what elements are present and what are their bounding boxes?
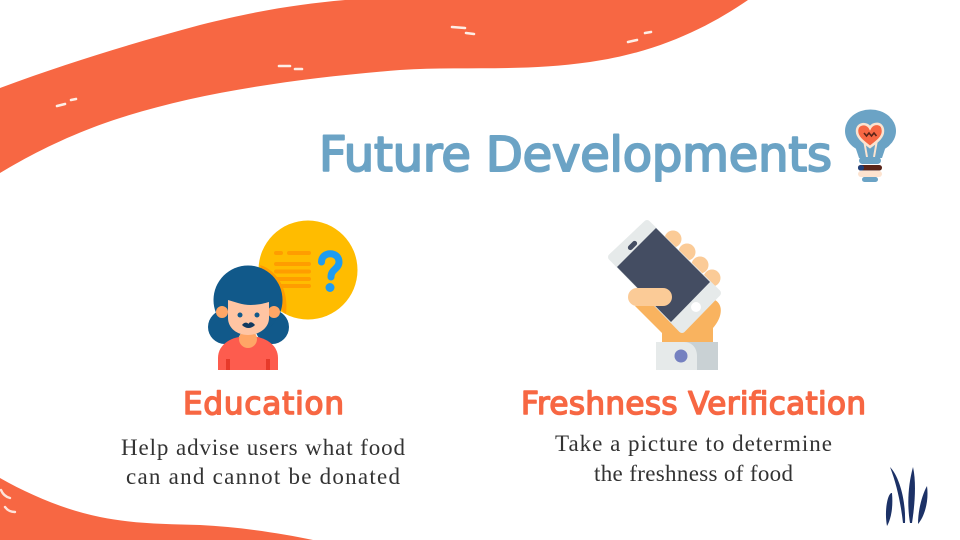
hand xyxy=(635,230,721,342)
text: education description: can and cannot be donated xyxy=(126,464,400,489)
icon: girl with question speech bubble xyxy=(208,220,358,370)
cuff xyxy=(656,342,718,370)
icon: navy grass logo xyxy=(886,467,928,526)
text: freshness description: the freshness of food xyxy=(594,461,794,486)
icon: light bulb with heart xyxy=(845,110,896,182)
text: freshness description: Take a picture to determine xyxy=(555,431,832,456)
text: education description xyxy=(121,435,406,489)
thumb xyxy=(628,288,672,306)
heading: Freshness Verification: Freshness Verification xyxy=(521,386,866,422)
text: freshness description xyxy=(555,431,832,486)
speech bubble xyxy=(258,220,358,320)
icon: hand holding phone xyxy=(612,224,721,370)
girl xyxy=(208,266,289,370)
heading: Education: Education xyxy=(183,386,344,422)
title: Future Developments xyxy=(319,127,832,183)
text: education description: Help advise users what food xyxy=(121,435,406,460)
bottom orange swoosh xyxy=(0,478,313,540)
phone xyxy=(612,224,718,330)
top orange swoosh xyxy=(0,0,748,173)
